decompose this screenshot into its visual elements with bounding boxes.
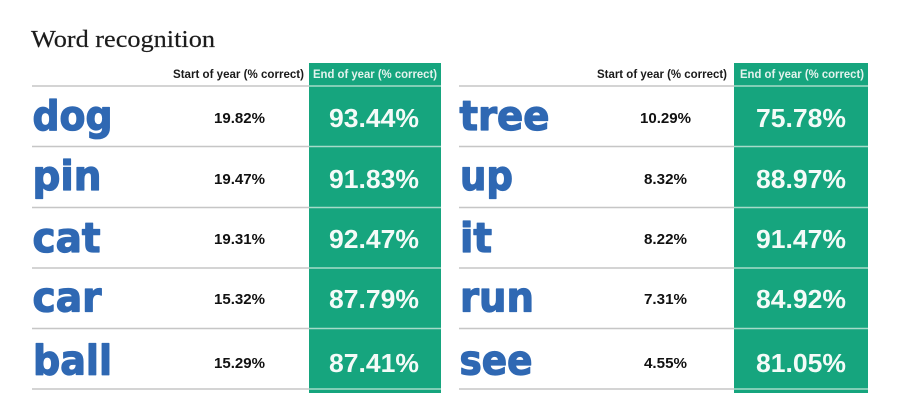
row: see: 4.55%: [644, 355, 687, 372]
row: tree: 10.29%: [640, 110, 691, 127]
row: cat: 19.31%: [214, 231, 265, 248]
right end-of-year green column: [734, 63, 868, 393]
panel: left table: [32, 63, 441, 393]
row: ball: [33, 336, 419, 384]
left end header: End of year (% correct): [313, 67, 437, 81]
row: car: [32, 274, 419, 322]
row: it: 8.22%: [644, 231, 687, 248]
row: pin: 19.47%: [214, 171, 265, 188]
row: up: 88.97%: [756, 164, 846, 194]
left row rules: [32, 86, 441, 389]
row: pin: [32, 152, 419, 200]
row: it: it: [460, 214, 492, 262]
row: car: 87.79%: [329, 284, 419, 314]
row: up: up: [460, 152, 513, 200]
row: cat: [32, 214, 419, 262]
right end header: End of year (% correct): [740, 67, 864, 81]
row: car: car: [32, 274, 102, 322]
panel: right table: [459, 63, 868, 393]
row: tree: [460, 92, 846, 140]
row: pin: pin: [32, 152, 102, 200]
row: run: run: [460, 274, 534, 322]
right start header: Start of year (% correct): [597, 67, 727, 81]
right row rules: [459, 86, 868, 389]
row: it: 91.47%: [756, 224, 846, 254]
row: up: [460, 152, 846, 200]
row: tree: 75.78%: [756, 103, 846, 133]
row: car: 15.32%: [214, 291, 265, 308]
title: Word recognition: [31, 27, 215, 53]
row: ball: ball: [33, 336, 112, 384]
row: ball: 15.29%: [214, 355, 265, 372]
left end-of-year green column: [309, 63, 441, 393]
row: tree: tree: [460, 92, 550, 140]
row: see: 81.05%: [756, 348, 846, 378]
row: it: [460, 214, 846, 262]
row: ball: 87.41%: [329, 348, 419, 378]
row: dog: dog: [32, 92, 112, 140]
row: cat: 92.47%: [329, 224, 419, 254]
row: run: [460, 274, 846, 322]
row: dog: 19.82%: [214, 110, 265, 127]
row: pin: 91.83%: [329, 164, 419, 194]
row: see: [460, 336, 846, 384]
row: dog: [32, 92, 419, 140]
row: up: 8.32%: [644, 171, 687, 188]
row: see: see: [460, 336, 532, 384]
left start header: Start of year (% correct): [173, 67, 304, 81]
row: run: 7.31%: [644, 291, 687, 308]
row: run: 84.92%: [756, 284, 846, 314]
row: dog: 93.44%: [329, 103, 419, 133]
row: cat: cat: [32, 214, 100, 262]
